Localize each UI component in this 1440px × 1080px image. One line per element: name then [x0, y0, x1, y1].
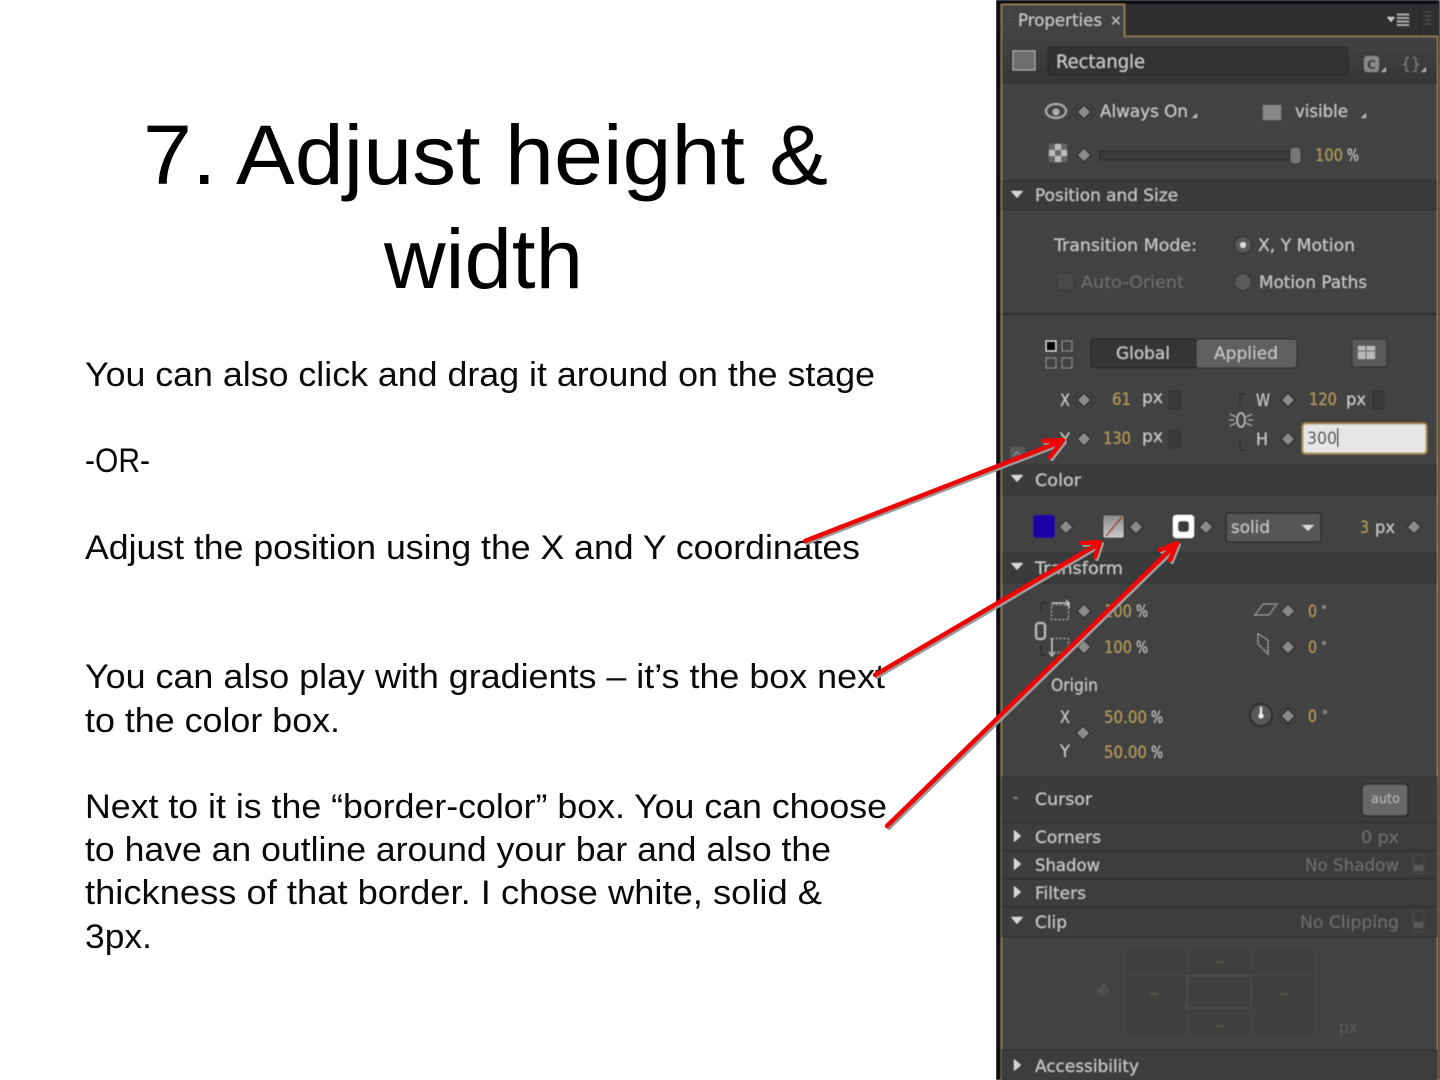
section: shadow: [1002, 851, 1437, 878]
transform values: Y: [1059, 742, 1071, 761]
text block: gradients: [85, 658, 886, 740]
global and applied toggle: [1046, 339, 1387, 368]
element name row: {}: [1401, 54, 1421, 73]
transition mode options: X, Y Motion: [1258, 236, 1355, 255]
color swatches and stroke: 3: [1360, 518, 1369, 537]
icon: panel menu: [1387, 14, 1409, 25]
fields: x y w h: px: [1142, 388, 1163, 407]
transform values: [1036, 600, 1327, 762]
clip inset grid: px: [1339, 1018, 1358, 1037]
fields: x y w h: Y: [1059, 430, 1071, 449]
display row: [1046, 102, 1366, 121]
arrow: to Y coordinate: [805, 440, 1065, 543]
transition mode options: [1053, 236, 1367, 292]
text block: coordinates: Adjust the position using the X and Y coordinates: [85, 529, 860, 567]
display row: Always On: [1100, 102, 1188, 121]
display row: visible: [1295, 102, 1348, 121]
transform values: X: [1060, 708, 1070, 727]
section: shadow: No Shadow: [1305, 856, 1399, 875]
fields: x y w h: [1010, 388, 1426, 460]
section: shadow: Shadow: [1035, 856, 1100, 875]
title: [143, 108, 828, 306]
fields: x y w h: 130: [1103, 429, 1131, 448]
section: accessibility: Accessibility: [1035, 1057, 1139, 1076]
transform values: 0: [1308, 707, 1317, 726]
fields: x y w h: px: [1346, 390, 1366, 409]
tab: properties: ×: [1110, 13, 1122, 29]
text block: drag on stage: You can also click and drag it around on the stage: [85, 356, 875, 394]
panel: properties screenshot: [996, 0, 1440, 1080]
text block: border color: Next to it is the “border-color” box. You can choose: [85, 788, 887, 826]
color swatches and stroke: solid: [1231, 518, 1270, 537]
section: position and size: [1002, 180, 1437, 210]
opacity slider: 100: [1315, 146, 1343, 165]
transition mode options: Transition Mode:: [1053, 236, 1197, 255]
fields: x y w h: 300: [1307, 429, 1337, 448]
tab: properties: Properties: [1018, 11, 1102, 30]
text block: border color: thickness of that border. I chose white, solid &: [85, 874, 822, 912]
title: 7. Adjust height &: [143, 108, 828, 202]
color swatches and stroke: [1033, 513, 1421, 542]
section: corners: 0 px: [1361, 828, 1399, 847]
transform values: 50.00: [1104, 708, 1147, 727]
transform values: 0: [1308, 602, 1317, 621]
transform values: %: [1136, 602, 1148, 621]
text block: border color: [85, 788, 887, 956]
section: corners: Corners: [1035, 828, 1101, 847]
text block: gradients: to the color box.: [85, 702, 340, 740]
section: transform: [1002, 553, 1437, 583]
arrow: to gradient box: [875, 542, 1102, 677]
global and applied toggle: Applied: [1214, 344, 1278, 363]
element name row: Rectangle: [1056, 51, 1145, 73]
transform values: 0: [1308, 638, 1317, 657]
section: position and size: Position and Size: [1035, 186, 1178, 205]
transform values: Origin: [1051, 676, 1098, 695]
opacity slider: %: [1347, 146, 1359, 165]
section: cursor: Cursor: [1035, 790, 1092, 809]
section: cursor: [1002, 777, 1437, 822]
section: accessibility: [1002, 1050, 1437, 1080]
fields: x y w h: 61: [1112, 390, 1131, 409]
section: filters: Filters: [1035, 884, 1086, 903]
fields: x y w h: X: [1060, 391, 1070, 410]
section: corners: [1002, 823, 1437, 850]
color swatches and stroke: px: [1375, 518, 1395, 537]
title: width: [383, 212, 583, 306]
text block: border color: 3px.: [85, 918, 152, 956]
fields: x y w h: H: [1256, 430, 1268, 449]
section: clip: [1002, 907, 1437, 937]
transform values: 100: [1104, 638, 1132, 657]
element name row: [1002, 37, 1437, 84]
section: color: Color: [1035, 471, 1081, 490]
transform values: 50.00: [1104, 743, 1147, 762]
section: filters: [1002, 879, 1437, 906]
opacity slider: [1049, 144, 1359, 165]
transform values: %: [1151, 743, 1163, 762]
section: color: [1002, 465, 1437, 495]
clip inset grid: [1096, 947, 1358, 1037]
fields: x y w h: px: [1142, 427, 1163, 446]
arrow: to border color box: [887, 543, 1179, 828]
global and applied toggle: Global: [1116, 344, 1170, 363]
text block: or: -OR-: [85, 442, 150, 480]
transform values: %: [1151, 708, 1163, 727]
element name row: C: [1367, 58, 1376, 72]
transform values: 100: [1104, 602, 1132, 621]
text block: border color: to have an outline around your bar and also the: [85, 831, 831, 869]
transition mode options: Motion Paths: [1259, 273, 1367, 292]
section: clip: No Clipping: [1300, 913, 1399, 932]
fields: x y w h: 120: [1309, 390, 1337, 409]
fields: x y w h: W: [1256, 391, 1270, 410]
text block: gradients: You can also play with gradients – it’s the box next: [85, 658, 886, 696]
transform values: %: [1136, 638, 1148, 657]
section: clip: Clip: [1035, 913, 1067, 932]
section: transform: Transform: [1034, 559, 1123, 578]
transition mode options: Auto-Orient: [1081, 273, 1185, 292]
section: cursor: auto: [1371, 792, 1400, 807]
